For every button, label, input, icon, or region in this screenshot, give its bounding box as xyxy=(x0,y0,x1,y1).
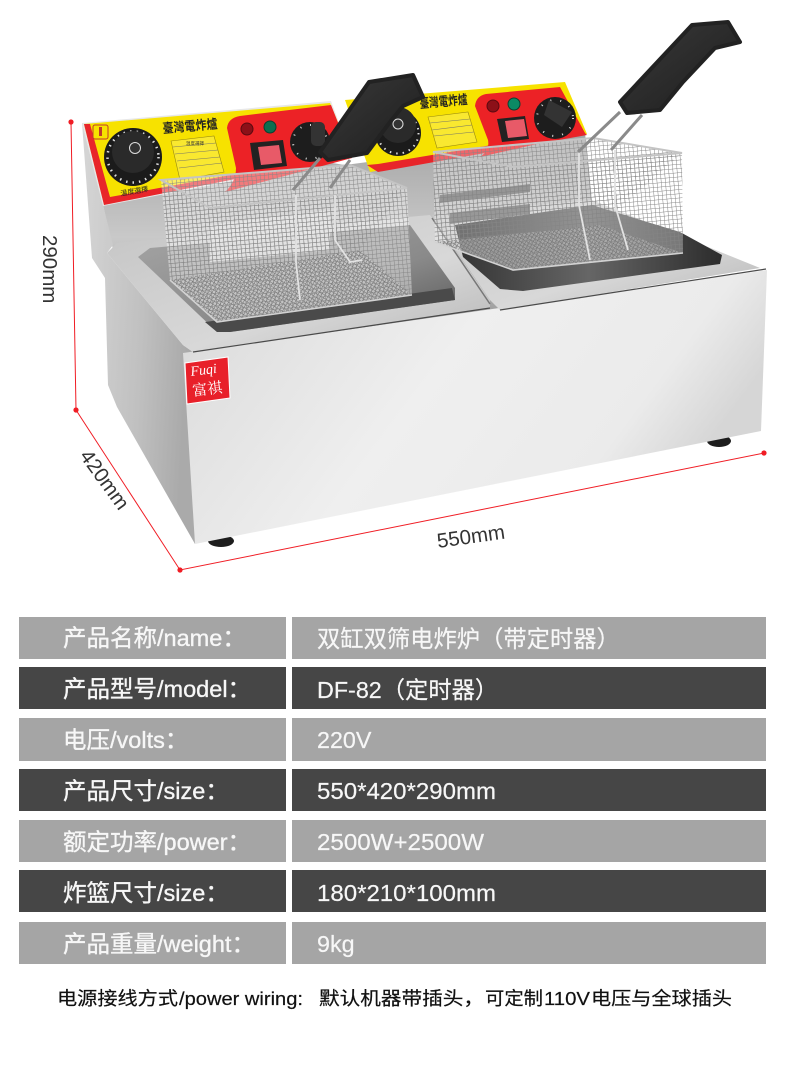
row: voltage xyxy=(19,718,766,761)
control panel right xyxy=(345,82,587,172)
dimension lines xyxy=(68,119,767,573)
indicator lights xyxy=(241,121,276,135)
left side face xyxy=(82,123,195,544)
row: model: DF-82（定时器） xyxy=(317,677,498,703)
left basket handle xyxy=(320,75,423,160)
temperature chart xyxy=(171,136,224,180)
brand badge: Fuqi xyxy=(189,362,218,380)
temperature dial xyxy=(375,107,421,156)
timer dial xyxy=(290,122,330,162)
power wiring note: 电压与全球插头 xyxy=(591,988,732,1009)
row: basket size xyxy=(19,870,766,912)
power wiring note xyxy=(57,988,732,1009)
row: product name: 双缸双筛电炸炉（带定时器） xyxy=(317,626,620,652)
left fry basket xyxy=(161,158,412,322)
row: voltage: 电压/volts： xyxy=(63,727,188,753)
rocker switch xyxy=(250,140,287,170)
power wiring note: 可定制 xyxy=(485,988,543,1009)
feet xyxy=(208,435,731,547)
dimension label: width: 550mm xyxy=(435,521,506,553)
row: rated power: 额定功率/power： xyxy=(63,829,251,855)
row: product size: 产品尺寸/size： xyxy=(63,778,229,804)
row: rated power: 2500W+2500W xyxy=(317,829,484,855)
rear wall xyxy=(82,123,592,352)
row: product size xyxy=(19,769,766,811)
row: product name: 产品名称/name： xyxy=(63,625,246,651)
thermometer icon xyxy=(93,125,108,139)
brand badge xyxy=(185,357,230,404)
spec table xyxy=(19,617,766,964)
right fry basket xyxy=(433,112,683,270)
timer dial xyxy=(534,97,576,139)
power wiring note: /power wiring: xyxy=(179,988,303,1009)
row: weight: 产品重量/weight： xyxy=(63,931,255,957)
row: rated power xyxy=(19,820,766,862)
row: product size: 550*420*290mm xyxy=(317,778,496,804)
rocker switch xyxy=(497,116,529,142)
front face xyxy=(183,270,767,544)
row: model xyxy=(19,667,766,709)
power wiring note: 110V xyxy=(544,988,591,1009)
temperature chart: 温度選擇 xyxy=(186,140,204,147)
row: weight xyxy=(19,922,766,964)
power wiring note: 默认机器带插头， xyxy=(319,988,484,1009)
indicator lights xyxy=(487,98,520,112)
dimension label: height: 290mm xyxy=(38,235,61,303)
row: basket size: 180*210*100mm xyxy=(317,880,496,906)
brand badge: 富祺 xyxy=(191,376,224,401)
temperature dial xyxy=(104,128,162,186)
row: voltage: 220V xyxy=(317,727,372,753)
panel caption: 温度選擇 xyxy=(120,184,149,198)
power wiring note: 电源接线方式 xyxy=(57,988,178,1009)
rim and tanks xyxy=(107,200,766,352)
control panel left xyxy=(82,101,352,206)
temperature chart xyxy=(428,112,477,148)
right basket handle xyxy=(620,22,740,113)
row: weight: 9kg xyxy=(317,931,355,957)
dimension label: depth: 420mm xyxy=(75,445,134,514)
row: model: 产品型号/model： xyxy=(63,676,251,702)
panel title: 臺灣電炸爐 xyxy=(419,92,468,111)
row: basket size: 炸篮尺寸/size： xyxy=(63,880,229,906)
product illustration: double-tank electric fryer xyxy=(82,22,767,547)
row: product name xyxy=(19,617,766,659)
panel title: 臺灣電炸爐 xyxy=(162,116,218,136)
